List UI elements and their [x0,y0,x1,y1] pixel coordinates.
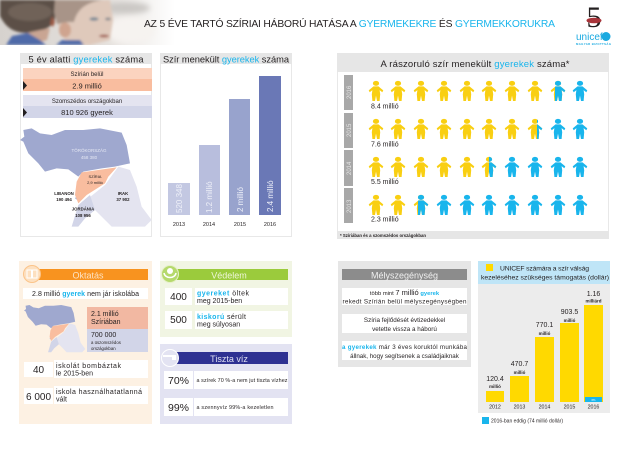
pictogram row 2013: 2.3 millió [371,216,399,224]
map: Syria and neighbours: TÖRÖKORSZÁG [71,147,107,153]
bar chart: funding: 470.7 [511,361,528,368]
pictogram row 2016: 8.4 millió [371,104,399,110]
pictogram row 2016: 2016 [347,85,353,99]
stat: 99 percent [164,398,288,416]
text: 7 million children: több mint 7 millió gyerek [370,288,440,297]
map: Syria and neighbours: SZÍRIA [89,174,102,179]
bar chart: 2016 [264,222,276,228]
bar chart: 520 348 [175,184,184,213]
bar chart: funding: 6% [591,398,596,402]
stat: 40 schools bombed: 40 [33,365,44,376]
stat: children out of school [23,288,148,299]
bar chart [168,76,281,228]
map: Syria and neighbours [20,128,152,227]
stat: 6000 schools unusable [24,386,148,404]
header photo: children [0,0,175,45]
stat: 700 000 in neighbouring countries: a üszomszédos [91,340,121,345]
pictogram row 2013: 2013 [347,199,353,213]
heading: education: Oktatás [72,270,104,280]
stat: 99 percent: a szennyvíz 99%-a kezeletlen [196,405,274,411]
bar chart: funding: 2015 [564,404,575,410]
stat: 70 percent: a szírek 70 %-a nem jut tiszta vízhez [196,378,288,384]
stat: 700 000 in neighbouring countries: országokban [91,346,116,351]
bar chart: funding: 2016 [588,404,599,410]
legend: funding need heading: UNICEF számára a szír válság [500,266,589,272]
stat: neighbouring countries: Szomszédos országokban [52,99,122,105]
bar chart: funding: millió [564,318,576,323]
stat: 2.1 million in Syria [87,307,148,329]
panel: Syrian refugee children bar chart [160,53,292,236]
stat: 400 children killed: meg 2015-ben [197,298,242,305]
text: development set back [342,314,467,333]
pictogram row 2015: 7.6 millió [371,142,399,148]
panel: extreme poverty [338,261,471,367]
panel: protection [160,261,292,337]
text: development set back: Szíria fejlődését évtizedekkel [364,317,445,324]
pictogram row 2014: 2014 [347,161,353,175]
text: child labour: állnak, hogy segítsenek a családjaiknak [350,353,460,360]
pictogram row 2015 [344,113,587,148]
bar chart: funding: millió [514,370,526,375]
stat: 40 schools bombed: iskolát bombáztak [56,363,122,370]
stat: 500 minors injured [165,311,288,329]
stat: 70 percent [164,371,288,389]
map: Syria and neighbours: IRAK [118,191,129,196]
stat: 99 percent: 99% [168,402,189,414]
bar chart: funding: 120.4 [486,376,504,383]
bar chart: funding [486,291,603,410]
stat: neighbouring countries [23,95,152,118]
footnote [337,231,609,239]
stat: 6000 schools unusable: 6 000 [26,392,51,403]
heading: clean water: Tiszta víz [210,354,248,364]
map: Syria and neighbours: 37 902 [116,197,130,202]
legend: 2016 so far: 2016-ban eddig (74 millió dollár) [491,418,563,424]
icon: book [24,266,40,282]
stat: 40 schools bombed: le 2015-ben [56,370,93,378]
stat: 70 percent: 70% [168,375,189,387]
stat: 400 children killed: 400 [170,292,187,303]
bar chart: 2013 [173,222,185,228]
bar chart: funding: 903.5 [561,309,578,316]
panel: UNICEF funding chart [478,261,610,413]
text: 7 million children: rekedt Szírián belül mélyszegénységben [342,298,467,306]
logo: unicef: unicef [576,32,603,43]
bar chart: 2 millió [236,187,245,212]
bar chart: 1.2 millió [205,181,214,213]
stat: 500 minors injured: 500 [170,315,187,326]
map: small Syria and neighbours [24,305,85,352]
stat: 500 minors injured: kiskorú sérült [197,314,246,321]
panel: education [19,261,152,424]
icon: protecting hands [162,266,178,282]
map: Syria and neighbours: 190 494 [56,197,72,202]
bar chart: funding: 770.1 [536,322,553,329]
panel: children under 5 [20,53,152,236]
legend: funding need heading: kezeléséhez szükséges támogatás (dollár) [481,274,609,282]
heading: protection: Védelem [211,270,247,280]
text: child labour: a gyerekek már 3 éves koruktól munkába [342,344,468,351]
panel heading: under 5: 5 év alatti gyerekek száma [28,54,144,64]
stat: 40 schools bombed [24,360,148,378]
panel: Syrian refugee children in need pictogram [337,53,609,239]
bar chart: funding: millió [539,331,551,336]
bar chart: 2.4 millió [266,180,275,212]
bar chart: funding: millió [489,384,501,389]
stat: 400 children killed [165,288,288,305]
stat: inside Syria [23,68,152,91]
bar chart: funding: milliárd [585,298,602,304]
pictogram row 2015: 2015 [347,123,353,137]
pictogram row 2014 [344,150,587,186]
stat: inside Syria: Szírián belül [70,72,104,78]
bar chart: 2014 [203,222,215,228]
legend: funding need heading [481,264,609,282]
text: development set back: vetette vissza a háború [372,326,437,333]
heading: education [36,269,148,280]
logo: unicef: MAGYAR BIZOTTSÁG [576,41,611,46]
panel heading: children in need: A rászoruló szír menekült gyerekek száma* [380,59,570,70]
map: Syria and neighbours: JORDÁNIA [72,206,94,212]
stat: 2.1 million in Syria: 2.1 millió [91,311,119,318]
bar chart: funding: 2014 [539,404,550,410]
stat: 500 minors injured: meg súlyosan [197,322,240,328]
footnote: * Szíriában és a szomszédos országokban [340,233,426,238]
stat: children out of school: 2.8 millió gyerek nem jár iskolába [32,291,139,298]
stat: inside Syria: 2.9 millió [72,82,102,90]
stat: 700 000 in neighbouring countries: 700 000 [91,332,116,339]
logo: 5 years of war: 5 [586,1,602,34]
pictogram row 2014: 5.5 millió [371,179,399,186]
map: Syria and neighbours: 458 380 [81,155,98,160]
bar chart: 2015 [234,222,246,228]
bar chart: funding: 2012 [489,404,501,410]
stat: 6000 schools unusable: vált [56,396,67,404]
stat: 2.1 million in Syria: Szíriában [91,319,121,326]
bar chart: funding: 2013 [514,404,525,410]
pictogram row 2016 [344,75,587,110]
map: Syria and neighbours: LIBANON [54,191,74,196]
stat: 400 children killed: gyereket öltek [197,290,250,298]
stat: 6000 schools unusable: iskola használhatatlanná [56,389,142,396]
logo: unicef [576,32,611,46]
text: child labour [342,341,468,360]
text: 7 million children [342,288,467,306]
map: Syria and neighbours: 2,9 millió [87,180,104,185]
bar chart: funding: 1.16 [587,291,600,298]
pictogram row 2013 [344,188,587,224]
icon: water tap [162,350,178,366]
stat: 700 000 in neighbouring countries [87,329,148,352]
stat: neighbouring countries: 810 926 gyerek [61,108,113,117]
panel: clean water [160,344,292,424]
map: Syria and neighbours: 108 956 [75,213,91,218]
panel heading: refugee children: Szír menekült gyerekek száma [163,54,290,64]
title: AZ 5 ÉVE TARTÓ SZÍRIAI HÁBORÚ HATÁSA A GYERMEKEKRE ÉS GYERMEKKORUKRA [144,17,555,30]
heading: extreme poverty: Mélyszegénység [371,270,438,280]
